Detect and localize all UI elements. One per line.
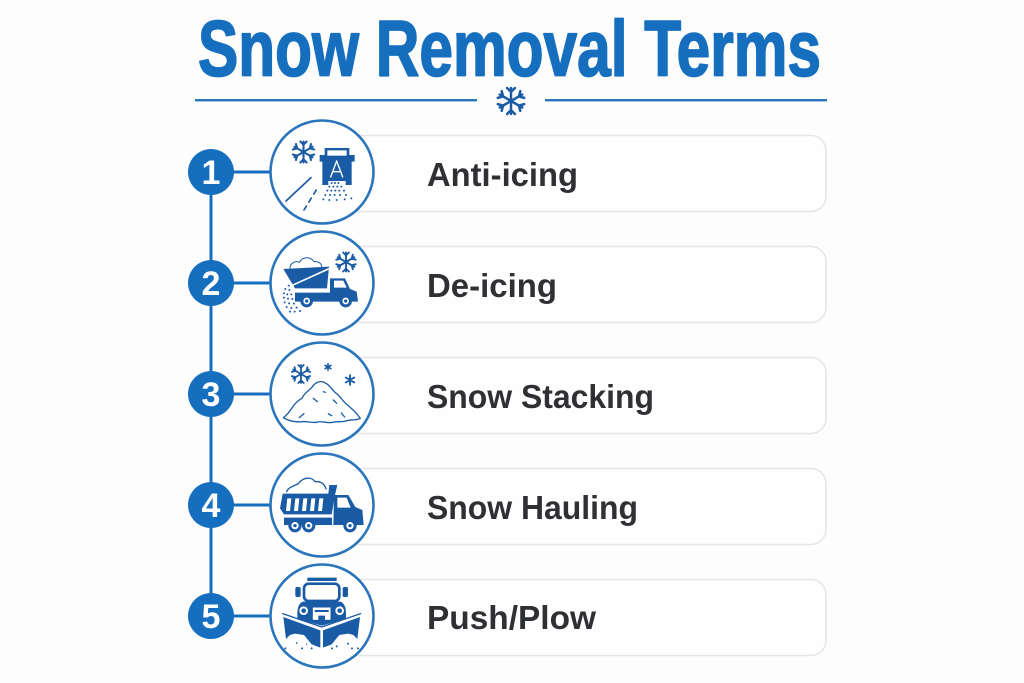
icon: snow pile	[270, 342, 374, 446]
label: Snow Hauling	[427, 489, 638, 526]
title: Snow Removal Terms	[198, 4, 821, 92]
row 1: Anti-icing	[188, 120, 578, 224]
number badge 5	[188, 593, 271, 639]
number badge 3: 3	[202, 376, 220, 414]
number badge 1	[188, 149, 271, 195]
number badge 2: 2	[202, 265, 220, 303]
number badge 5: 5	[202, 598, 220, 636]
icon: de-icing dump truck	[270, 232, 374, 334]
label: De-icing	[427, 267, 557, 304]
number badge 4: 4	[202, 487, 221, 525]
icon: front plow truck	[270, 564, 374, 668]
timeline connector	[210, 172, 212, 616]
row 2: De-icing	[188, 232, 557, 334]
number badge 1: 1	[202, 154, 220, 192]
number badge 3	[188, 371, 271, 417]
label: Snow Stacking	[427, 378, 654, 415]
icon: dump truck hauling snow	[270, 454, 374, 556]
row 4: Snow Hauling	[188, 454, 638, 556]
row 3: Snow Stacking	[188, 342, 654, 446]
number badge 4	[188, 482, 271, 528]
label: Push/Plow	[427, 599, 596, 636]
panel: term cards	[330, 136, 826, 656]
icon: salt spreader truck	[270, 120, 374, 224]
label: Anti-icing	[427, 156, 578, 193]
header divider with snowflake	[195, 88, 827, 114]
number badge 2	[188, 260, 271, 306]
row 5: Push/Plow	[188, 564, 596, 668]
